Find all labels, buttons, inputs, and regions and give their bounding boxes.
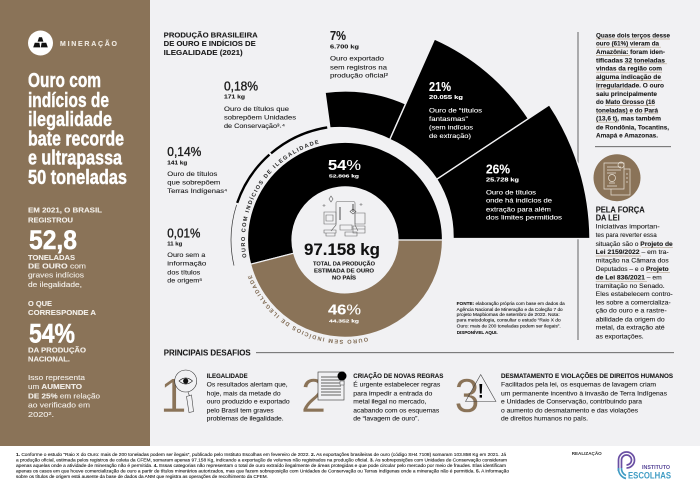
text block: origin of gold in the Amazon: ouro (61%) vieram da [596, 41, 659, 48]
text block: origin of gold in the Amazon: Quase dois terços desse [596, 32, 670, 39]
title: e ultrapassa [28, 148, 123, 170]
text: de direitos humanos no país. [501, 416, 588, 423]
text: problemas de ilegalidade. [207, 416, 284, 423]
label: 7 percent: sem registros na [330, 64, 387, 71]
label: 0,01 percent: informação [167, 261, 207, 268]
label: 26 percent [486, 161, 563, 222]
total: 97.158 kg: TOTAL DA PRODUÇÃO [313, 261, 375, 268]
icon: law documents [594, 154, 640, 201]
label: 7 percent [330, 28, 389, 79]
total: 97.158 kg [304, 241, 380, 282]
logo swirl [618, 452, 634, 478]
label: 26 percent: 26% [486, 161, 510, 176]
label: 26 percent: extração para além [486, 206, 552, 213]
numeral 1: 1 [160, 370, 187, 423]
divider line: right column [577, 32, 579, 340]
arc: 0,01 percent [231, 205, 237, 266]
stat: 54 percent: DA PRODUÇÃO [28, 346, 86, 355]
donut label: 54 percent: 52.806 kg [329, 174, 359, 179]
text block: by force of law [596, 205, 673, 340]
text block: by force of law: metal, da extração até [596, 325, 665, 332]
label: 0,18 percent: Ouro de títulos que [224, 106, 289, 113]
icon: document with seal [318, 372, 346, 400]
text: pelo Brasil tem graves [207, 407, 274, 414]
text: increase compared to 2020: 2020². [28, 410, 54, 419]
label: 0,18 percent: de Conservação³˒⁴ [224, 123, 285, 130]
label: 21 percent [429, 79, 483, 140]
text block: by force of law: as exportações. [596, 333, 644, 340]
sector: 7 percent [325, 91, 406, 140]
sector: 26 percent [437, 105, 590, 239]
label: 0,01 percent: 11 kg [167, 241, 183, 247]
text: increase compared to 2020: ao verificado em [28, 401, 90, 410]
label: 21 percent: (sem indícios [429, 125, 474, 132]
logo: Instituto Escolhas: ESCOLHAS [628, 471, 671, 482]
text block: by force of law: Deputados – e o Projeto [596, 266, 669, 273]
donut label: 54 percent: 54% [328, 157, 361, 174]
source note: Agência Nacional de Mineração e da Coleção 7 do [457, 307, 563, 312]
logo: Instituto Escolhas [618, 452, 671, 482]
text: o aumento do desmatamento e das violações [501, 407, 639, 414]
label: 26 percent: Ouro de títulos [486, 189, 537, 196]
text block: by force of law: tes para reverter essa [596, 232, 657, 239]
label: 0,01 percent [167, 226, 207, 285]
text: increase compared to 2020: DE 25% em relação [28, 391, 100, 400]
title [28, 70, 127, 189]
chart: sectors of gold with illegality signs [325, 39, 590, 239]
text block: origin of gold in the Amazon: alguma indicação de [596, 74, 661, 81]
label: 21 percent: 21% [429, 79, 451, 94]
text: É urgente estabelecer regras [353, 380, 441, 389]
chart: donut of total production [248, 142, 443, 337]
donut segment: without illegality signs [251, 240, 442, 337]
stat: 52,8 tonnes: REGISTROU [28, 215, 73, 224]
stat: 52,8 tonnes: EM 2021, O BRASIL [28, 206, 103, 215]
stat: 52,8 tonnes: de ilegalidade, [28, 280, 82, 289]
text block: origin of gold in the Amazon: (13,6 t), mas também [596, 116, 661, 123]
stat: 52,8 tonnes: 52,8 [29, 225, 77, 255]
label: 0,18 percent: 171 kg [224, 95, 246, 101]
icon: magnifier with eye [175, 370, 197, 412]
text block: origin of gold in the Amazon: vindas da região com [596, 66, 662, 73]
text block: origin of gold in the Amazon: toneladas) e do Pará [596, 107, 658, 114]
label: 21 percent: de extração) [429, 133, 471, 140]
footnotes: 1. Conforme o estudo “Raio X do Ouro: mais de 200 toneladas podem ser ilegais”, publicado pelo Instituto Escolhas em fevereiro de 2022. 2. As exportações brasileiras de ouro (código SH4 7108) somaram 103.858 Kg em 2021. Já [16, 452, 506, 457]
text block: by force of law: de Lei 836/2021 – em [596, 274, 662, 281]
icon: gold bars [28, 30, 53, 56]
label: 0,18 percent [224, 80, 297, 130]
text [501, 371, 674, 423]
label: 7 percent: 6.700 kg [330, 45, 360, 51]
label: 7 percent: 7% [330, 28, 346, 43]
label: 0,01 percent: Ouro sem a [167, 252, 206, 259]
label: 0,14 percent: 0,14% [167, 145, 201, 159]
source note: projeto Mapbiomas de setembro de 2022. Nota: [457, 312, 560, 317]
stat: 54 percent [28, 299, 96, 364]
label: 7 percent: produção oficial² [330, 72, 389, 79]
text block: origin of gold in the Amazon: do Mato Grosso (16 [596, 99, 655, 106]
text block: by force of law: PELA FORÇA [596, 205, 645, 215]
source note [457, 301, 565, 335]
stat: 54 percent: O QUE [28, 299, 52, 308]
heading: chart title: DE OURO E INDÍCIOS DE [164, 39, 256, 48]
icon: warning triangle [466, 374, 496, 402]
source note: FONTE: elaboração própria com base em dados da [457, 301, 565, 306]
text: increase compared to 2020 [28, 373, 100, 419]
title: 50 toneladas [28, 167, 127, 189]
numeral 3: 3 [454, 370, 480, 423]
sector: 21 percent [390, 39, 528, 179]
text block: origin of gold in the Amazon: tificadas 32 toneladas [596, 57, 665, 64]
text block: by force of law: abilidade da origem do [596, 316, 665, 323]
label: 21 percent: Ouro de “títulos [429, 108, 483, 115]
heading: main challenges: PRINCIPAIS DESAFIOS [164, 348, 251, 357]
text block: origin of gold in the Amazon [596, 32, 670, 139]
label: 21 percent: 20.055 kg [429, 95, 464, 101]
stat: 52,8 tonnes: DE OURO com [28, 262, 86, 270]
source note: para metodologia, consultar o estudo “Raio X do [457, 318, 561, 323]
stat: 54 percent: 54% [29, 319, 75, 349]
footnotes [16, 452, 509, 479]
text block: by force of law: tramitação no Senado. [596, 283, 665, 290]
numeral 2: 2 [301, 370, 326, 423]
text: e Unidades de Conservação, contribuindo para [501, 399, 642, 406]
stat: 52,8 tonnes: TONELADAS [28, 253, 75, 262]
text block: by force of law: les sobre a comercializa- [596, 299, 671, 306]
title: bate recorde [28, 128, 124, 150]
source note: Ouro: mais de 200 toneladas podem ser ilegais”. [457, 324, 561, 329]
footnotes: apenas os casos em que houve comercialização de ouro a partir de títulos minerários autorizados, mas que fazem sobreposição com Unidades de Conservação ou Terras Indígenas onde a mineração não é permitida. 5. A informação [16, 468, 509, 474]
heading: chart title: ILEGALIDADE (2021) [164, 48, 243, 57]
text block: origin of gold in the Amazon: Amazônia: foram iden- [596, 49, 665, 56]
arc: 0,18 percent [271, 127, 327, 153]
stat: 54 percent: CORRESPONDE A [28, 308, 96, 317]
logo: Instituto Escolhas: INSTITUTO [642, 465, 670, 471]
section label: MINERAÇÃO [60, 39, 118, 48]
footnotes: a produção oficial, estimada pelos registros de coleta da CFEM, somaram apenas 97.158 Kg, indicando a exportação de volumes não registrados na produção oficial. 3. As sobreposições com Unidades de Conservação consideram [16, 458, 507, 462]
donut label: 46 percent: 44.352 kg [329, 318, 359, 323]
total: 97.158 kg: 97.158 kg [304, 241, 380, 259]
text: hoje, mais da metade do [207, 390, 281, 397]
panel: left sidebar [0, 0, 150, 446]
text block: origin of gold in the Amazon: Amapá e Amazonas. [596, 132, 658, 139]
text: DESMATAMENTO E VIOLAÇÕES DE DIREITOS HUMANOS [501, 371, 674, 380]
footnotes: apenas aquelas onde a atividade de mineração não é permitida. 4. Essas categorias não representam o total de ouro extraído ilegalmente de áreas protegidas e que pode circular pelo mercado por meio de fraudes. Elas identificam [16, 463, 506, 468]
text: Os resultados alertam que, [207, 382, 288, 389]
label: 0,01 percent: 0,01% [167, 226, 200, 240]
text [207, 373, 290, 423]
label: 0,01 percent: de origem⁵ [167, 278, 203, 285]
curved label: with illegality signs: OURO COM INDÍCIOS DE ILEGALIDADE [241, 140, 319, 258]
label: 21 percent: fantasmas” [429, 116, 468, 123]
text block: by force of law: DA LEI [596, 212, 620, 222]
stat: 52,8 tonnes [28, 206, 103, 289]
stat: 54 percent: NACIONAL. [28, 355, 70, 364]
text block: by force of law: Iniciativas importan- [596, 224, 660, 231]
text: increase compared to 2020: Isso representa [28, 373, 85, 382]
text block: origin of gold in the Amazon: de Rondônia, Tocantins, [596, 124, 669, 131]
label: 0,14 percent: Ouro de títulos [167, 171, 218, 178]
label: 0,14 percent: 141 kg [167, 161, 188, 167]
title: Ouro com [28, 70, 101, 92]
label: 0,18 percent: 0,18% [224, 80, 258, 94]
total: 97.158 kg: NO PAÍS [332, 274, 357, 282]
label: 0,14 percent: Terras Indígenas⁴ [167, 188, 227, 195]
label: 0,18 percent: sobrepõem Unidades [224, 114, 297, 121]
text: CRIAÇÃO DE NOVAS REGRAS [353, 371, 444, 380]
label: 0,01 percent: dos títulos [167, 269, 201, 276]
label: 26 percent: 25.728 kg [486, 178, 520, 184]
heading: chart title: PRODUÇÃO BRASILEIRA [164, 31, 258, 40]
total: 97.158 kg: ESTIMADA DE OURO [314, 269, 374, 275]
donut label: 46 percent: 46% [328, 301, 361, 318]
title: ilegalidade [28, 109, 112, 131]
text block: by force of law: mitação na Câmara dos [596, 257, 669, 264]
label: 0,14 percent: que sobrepõem [167, 180, 221, 187]
text: metal ilegal no mercado, [353, 399, 426, 406]
credit label: REALIZAÇÃO [572, 450, 602, 456]
label: 7 percent: Ouro exportado [330, 56, 384, 63]
text: ouro produzido e exportado [207, 399, 290, 406]
text: increase compared to 2020: um AUMENTO [28, 382, 82, 391]
text block: by force of law: Eles estabelecem contro- [596, 291, 673, 298]
text block: origin of gold in the Amazon: saiu principalmente [596, 91, 657, 98]
text: para impedir a entrada do [353, 390, 433, 397]
arc: 0,14 percent [237, 155, 269, 203]
label: 26 percent: dos limites permitidos [486, 215, 563, 222]
curved label: without illegality signs: OURO SEM INDÍCIOS DE ILEGALIDADE [248, 275, 368, 344]
text: acabando com os esquemas [353, 407, 440, 414]
title: indícios de [28, 90, 109, 112]
text block: origin of gold in the Amazon: irregularidade. O ouro [596, 83, 664, 90]
text: um permanente incentivo à invasão de Terra Indígenas [501, 390, 668, 397]
text: de “lavagem de ouro”. [353, 416, 419, 423]
text block: by force of law: ção do ouro e a rastre- [596, 308, 667, 315]
footnotes: sobre os títulos de origem está ausente da base de dados da ANM que registra as operações de recolhimento da CFEM. [16, 474, 268, 479]
text block: by force of law: situação são o Projeto de [596, 241, 673, 248]
challenge 2: new rules [301, 370, 444, 423]
stat: 52,8 tonnes: graves indícios [28, 271, 84, 280]
text block: by force of law: Lei 2159/2022 – em tra- [596, 249, 669, 256]
source note: DISPONÍVEL AQUI. [457, 328, 498, 335]
heading: chart title [164, 31, 258, 57]
donut segment: with illegality signs [248, 142, 443, 264]
challenge 3: deforestation and human rights [454, 370, 674, 423]
icon: gold ingot pile [322, 196, 365, 236]
text: Facilitados pela lei, os esquemas de lavagem criam [501, 382, 657, 389]
text [353, 371, 444, 423]
label: 0,14 percent [167, 145, 227, 195]
text: ILEGALIDADE [207, 373, 248, 380]
label: 26 percent: onde há indícios de [486, 198, 552, 205]
challenge 1: illegality [160, 370, 290, 423]
